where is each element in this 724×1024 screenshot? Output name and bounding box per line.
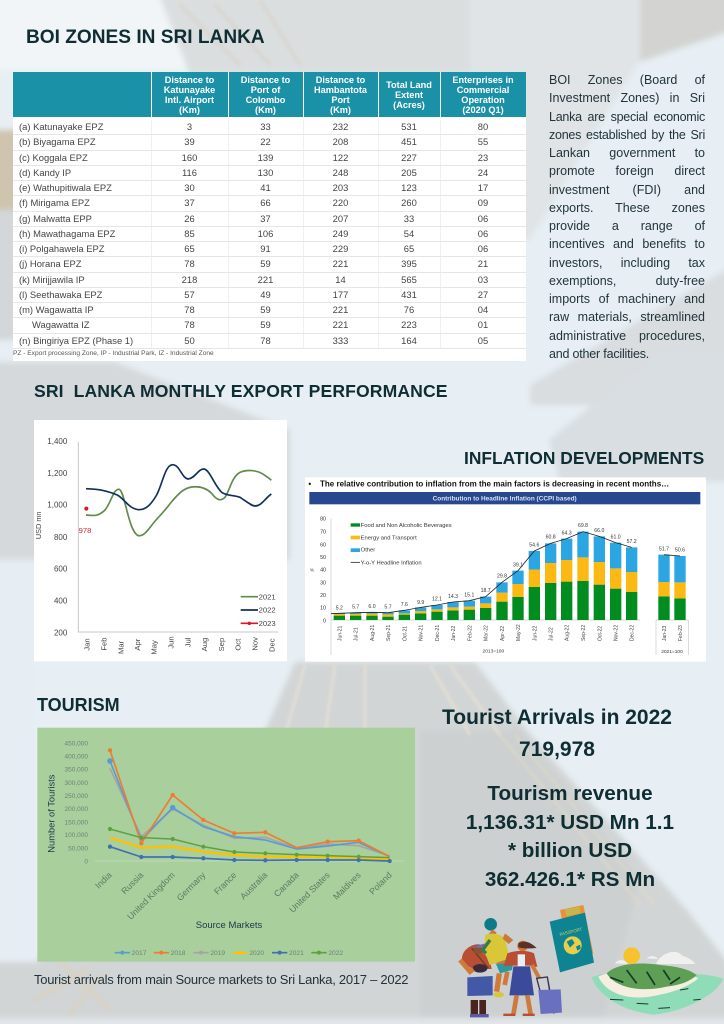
- table: BOI zones: 39: [184, 136, 195, 147]
- text block: BOI description: Investment Zones) in Sri: [549, 91, 705, 105]
- table: BOI zones: 220: [333, 197, 348, 208]
- table: BOI zones: 27: [478, 289, 488, 300]
- category labels: Maldives: [331, 870, 363, 902]
- table: BOI zones: 21: [478, 258, 488, 269]
- table: BOI zones: 260: [401, 197, 417, 208]
- table: BOI zones: (j) Horana EPZ: [19, 258, 82, 269]
- table: BOI zones: 223: [401, 319, 417, 330]
- table: BOI zones: 80: [478, 121, 488, 132]
- table: BOI zones: 04: [478, 304, 488, 315]
- table: BOI zones: 122: [333, 152, 348, 163]
- stat: tourism revenue: 1,136.31* USD Mn 1.1: [466, 811, 674, 834]
- month labels: Dec-22: [630, 625, 636, 641]
- y axis labels: 200: [54, 628, 68, 637]
- table: BOI zones: 106: [258, 228, 273, 239]
- category labels: France: [212, 870, 238, 897]
- table: BOI zones: 49: [260, 289, 271, 300]
- legend: 2020: [249, 950, 264, 957]
- x axis labels: Feb: [99, 637, 108, 651]
- series 2021: [109, 845, 391, 862]
- y axis labels: 350,000: [64, 767, 88, 774]
- table: BOI zones: 26: [184, 213, 195, 224]
- legend: 2021: [259, 592, 276, 601]
- value labels: 39.1: [513, 563, 523, 569]
- table: BOI zones: 451: [401, 136, 417, 147]
- value labels: 14.3: [448, 594, 458, 600]
- month labels: Oct-22: [597, 626, 603, 641]
- table: BOI zones: (Km): [179, 104, 200, 114]
- category labels: [93, 870, 394, 922]
- legend: 2022: [259, 606, 276, 615]
- category labels: Canada: [272, 870, 301, 899]
- table: BOI zones: 41: [260, 182, 271, 193]
- month labels: [337, 624, 684, 641]
- y axis: [310, 516, 326, 624]
- legend: 2022: [328, 950, 343, 957]
- category labels: India: [93, 870, 114, 891]
- table: BOI zones: (c) Koggala EPZ: [19, 152, 88, 163]
- legend: [115, 950, 343, 957]
- value labels: 50.6: [675, 547, 685, 553]
- text block: BOI description: exports. These zones: [549, 201, 705, 215]
- table: BOI zones: 207: [333, 213, 348, 224]
- y axis labels: 1,400: [47, 437, 68, 446]
- table: BOI zones: Distance to: [165, 74, 214, 84]
- y axis: 10: [320, 606, 326, 612]
- text block: BOI description: Lanka are special economic: [549, 110, 705, 124]
- base year labels: 2013=100: [483, 649, 504, 655]
- table: BOI zones: 232: [333, 121, 348, 132]
- y axis labels: 400,000: [64, 754, 88, 761]
- table: BOI zones: 395: [401, 258, 417, 269]
- table: BOI zones: 37: [184, 197, 195, 208]
- value labels: 66.0: [594, 528, 604, 534]
- value labels: 5.2: [336, 605, 343, 611]
- table: BOI zones: (k) Mirijjawila IP: [19, 274, 85, 285]
- y axis labels: 250,000: [64, 793, 88, 800]
- text block: BOI description: and other facilities.: [549, 347, 649, 361]
- table: BOI zones: (m) Wagawatta IP: [19, 304, 94, 315]
- table: BOI zones: 14: [335, 274, 346, 285]
- table: BOI zones: 91: [260, 243, 271, 254]
- table: BOI zones: (a) Katunayake EPZ: [19, 121, 103, 132]
- table: BOI zones: 160: [182, 152, 197, 163]
- line chart: monthly exports: [34, 420, 287, 662]
- chart title bar: [309, 492, 700, 504]
- category labels: Australia: [238, 870, 269, 901]
- y axis: 60: [320, 542, 326, 548]
- table: BOI zones: 531: [401, 121, 417, 132]
- y axis: 0: [323, 618, 326, 624]
- table: BOI zones: 65: [404, 243, 414, 254]
- table: BOI zones: Distance to: [316, 74, 365, 84]
- table: BOI zones: 30: [184, 182, 195, 193]
- table: BOI zones: 65: [184, 243, 195, 254]
- table: BOI zones: 221: [333, 319, 348, 330]
- table: BOI zones: (2020 Q1): [462, 104, 504, 114]
- table: BOI zones: Katunayake: [164, 84, 215, 94]
- value labels: 57.2: [627, 539, 637, 545]
- text block: BOI description: investors, including tax: [549, 256, 705, 270]
- month labels: Apr-22: [500, 626, 506, 641]
- value labels: 12.1: [432, 596, 442, 602]
- y axis: 70: [320, 530, 326, 536]
- series 2022: [109, 828, 390, 858]
- table: BOI zones: (Km): [330, 104, 351, 114]
- table: BOI zones: (g) Malwatta EPP: [19, 213, 92, 224]
- table: BOI zones: (n) Bingiriya EPZ (Phase 1): [19, 335, 133, 346]
- table: BOI zones: 03: [478, 274, 488, 285]
- legend: Other: [361, 548, 375, 554]
- x axis labels: [83, 636, 276, 655]
- y axis labels: 1,200: [47, 469, 68, 478]
- y axis labels: [64, 740, 88, 865]
- table: BOI zones: 203: [333, 182, 348, 193]
- table: BOI zones: 33: [260, 121, 271, 132]
- series 2017: [108, 759, 390, 857]
- x axis labels: Jan: [83, 638, 92, 651]
- x axis labels: May: [150, 640, 159, 655]
- y axis labels: [34, 437, 68, 637]
- value labels: [336, 523, 685, 611]
- table: BOI zones: 3: [187, 121, 192, 132]
- text block: BOI description: incentives and benefits to: [549, 237, 705, 251]
- table: BOI zones: (Acres): [393, 100, 425, 110]
- text block: BOI description: investment (FDI) and: [549, 182, 705, 196]
- x axis labels: Aug: [200, 638, 209, 651]
- month labels: Jul-22: [549, 627, 555, 641]
- y axis labels: 100,000: [64, 832, 88, 839]
- text block: BOI description: exemptions, duty-free: [549, 274, 705, 288]
- table: BOI zones: Operation: [461, 94, 505, 104]
- value labels: 29.8: [497, 574, 507, 580]
- table: BOI zones: 50: [184, 335, 195, 346]
- table: BOI zones: 221: [333, 304, 348, 315]
- value labels: 9.9: [417, 600, 424, 606]
- table: BOI zones: 01: [478, 319, 488, 330]
- table: BOI zones: 24: [478, 167, 488, 178]
- point: 2023 January 978: [79, 507, 91, 535]
- month labels: Aug-21: [370, 625, 376, 641]
- table: BOI zones: (i) Polgahawela EPZ: [19, 243, 104, 254]
- text block: BOI description: zones established by the Sri: [549, 128, 705, 142]
- text block: BOI description: provide a range of: [549, 219, 705, 233]
- month labels: Jul-21: [354, 627, 360, 641]
- table: BOI zones: 565: [401, 274, 417, 285]
- axis title: number of tourists: Number of Tourists: [47, 774, 57, 853]
- y axis: 30: [320, 580, 326, 586]
- stat: tourism revenue: 362.426.1* RS Mn: [485, 868, 655, 891]
- value labels: 15.1: [464, 593, 474, 599]
- x axis labels: Jun: [167, 636, 176, 649]
- table: BOI zones: 123: [401, 182, 417, 193]
- value labels: 60.8: [546, 535, 556, 541]
- table: BOI zones: 218: [182, 274, 197, 285]
- table: BOI zones: 59: [260, 304, 271, 315]
- table: BOI zones: 06: [478, 243, 488, 254]
- axis title: source markets: Source Markets: [196, 920, 263, 931]
- table: BOI zones: 09: [478, 197, 488, 208]
- table: BOI zones: 221: [333, 258, 348, 269]
- month labels: Jun-21: [337, 625, 343, 641]
- legend: [241, 592, 276, 628]
- table: BOI zones: 55: [478, 136, 488, 147]
- icon: island: [592, 947, 723, 1015]
- y axis labels: 200,000: [64, 806, 88, 813]
- x axis labels: Sep: [217, 638, 226, 651]
- table: BOI zones: 248: [333, 167, 348, 178]
- chart: contribution to headline inflation: [305, 477, 706, 662]
- x axis labels: Jul: [183, 637, 192, 647]
- base year labels: 2021=100: [661, 649, 683, 655]
- table: BOI zones: 23: [478, 152, 488, 163]
- table: BOI zones: Port of: [251, 84, 280, 94]
- table: BOI zones: Extent: [395, 90, 423, 100]
- table: BOI zones: 78: [184, 319, 195, 330]
- value labels: 5.7: [384, 605, 392, 611]
- table: BOI zones: Enterprises in: [452, 74, 514, 84]
- table: BOI zones: 06: [478, 228, 488, 239]
- bars: food: [339, 581, 680, 620]
- y axis: 50: [320, 555, 326, 561]
- table: BOI zones: (e) Wathupitiwala EPZ: [19, 182, 112, 193]
- legend: 2021: [289, 950, 304, 957]
- value labels: 69.8: [578, 523, 588, 529]
- y axis labels: 50,000: [68, 845, 88, 852]
- series 2020: [110, 838, 390, 859]
- value labels: 61.0: [611, 534, 621, 540]
- bars: other: [339, 532, 680, 614]
- table: BOI zones: 164: [401, 335, 417, 346]
- y axis: 20: [320, 593, 326, 599]
- series 2019: [110, 768, 390, 856]
- legend: Energy and Transport: [361, 535, 417, 541]
- legend: 2023: [259, 619, 276, 628]
- heading: BOI zones: BOI ZONES IN SRI LANKA: [26, 27, 265, 48]
- heading: tourism: TOURISM: [37, 695, 120, 715]
- table: BOI zones: (b) Biyagama EPZ: [19, 136, 96, 147]
- table: BOI zones: Colombo: [246, 94, 285, 104]
- category labels: United Kingdom: [125, 870, 177, 922]
- month labels: Feb-23: [678, 625, 684, 641]
- x axis labels: Apr: [133, 638, 142, 651]
- y axis: %: [310, 567, 314, 572]
- table: BOI zones: 22: [260, 136, 271, 147]
- text block: BOI description: Lankan government to: [549, 146, 705, 160]
- y axis labels: 0: [84, 858, 88, 865]
- x axis labels: Dec: [267, 638, 276, 652]
- table: BOI zones: (l) Seethawaka EPZ: [19, 289, 102, 300]
- stat: tourism revenue: Tourism revenue: [487, 782, 653, 805]
- text block: BOI description: administrative procedures,: [549, 328, 705, 342]
- table: BOI zones: 249: [333, 228, 348, 239]
- category labels: United States: [287, 870, 332, 915]
- month labels: Jan-23: [662, 625, 668, 641]
- month labels: Sep-21: [386, 625, 392, 641]
- chart: contribution to headline inflation: The relative contribution to inflation from the main factors is decreasing in recent months…: [320, 479, 669, 488]
- table: BOI zones: 54: [404, 228, 414, 239]
- table: BOI zones: Commercial: [457, 84, 509, 94]
- table: BOI zones: 139: [258, 152, 273, 163]
- table: BOI zones: 130: [258, 167, 273, 178]
- month labels: Dec-21: [435, 625, 441, 641]
- table: BOI zones: 227: [401, 152, 417, 163]
- table: BOI zones: Distance to: [241, 74, 290, 84]
- month labels: May-22: [516, 624, 522, 641]
- value labels: 51.7: [659, 546, 669, 552]
- table: BOI zones: 57: [184, 289, 195, 300]
- x axis labels: Mar: [116, 640, 125, 654]
- chart headline: •: [308, 480, 311, 489]
- line: headline inflation: [331, 532, 680, 614]
- text block: BOI description: imports of machinery and: [549, 292, 705, 306]
- value labels: 5.7: [352, 605, 359, 611]
- y axis: 40: [320, 568, 326, 574]
- table: BOI zones: PZ - Export processing Zone, IP - Industrial Park, IZ - Industrial Zone: [13, 350, 214, 357]
- illustration: travellers, passport and island: [458, 905, 724, 1018]
- text block: BOI description: promote foreign direct: [549, 164, 705, 178]
- month labels: Oct-21: [402, 626, 408, 641]
- y axis labels: USD mn: [34, 511, 43, 539]
- value labels: 18.7: [481, 588, 491, 594]
- table: BOI zones: 37: [260, 213, 271, 224]
- series 2018: [109, 749, 390, 857]
- y axis labels: 450,000: [64, 740, 88, 747]
- text block: BOI description: [549, 73, 705, 361]
- y axis labels: 150,000: [64, 819, 88, 826]
- month labels: Sep-22: [581, 625, 587, 641]
- table: BOI zones: 78: [260, 335, 271, 346]
- x axis labels: Nov: [250, 637, 259, 651]
- caption: tourism chart: Tourist arrivals from main Source markets to Sri Lanka, 2017 – 2022: [34, 972, 408, 987]
- category labels: Germany: [175, 870, 208, 903]
- legend: Y-o-Y Headline Inflation: [361, 560, 422, 566]
- table: BOI zones: 33: [404, 213, 414, 224]
- month labels: Nov-22: [614, 625, 620, 641]
- y axis labels: 600: [54, 565, 68, 574]
- y axis labels: 400: [54, 597, 68, 606]
- table: BOI zones: 177: [333, 289, 348, 300]
- icon: travellers: [460, 918, 562, 1017]
- stat: tourist arrivals: Tourist Arrivals in 2022: [442, 706, 672, 729]
- table: BOI zones: 116: [182, 167, 197, 178]
- category labels: Poland: [367, 870, 394, 897]
- value labels: 54.6: [529, 543, 539, 549]
- month labels: Aug-22: [565, 625, 571, 641]
- table: BOI zones: 208: [333, 136, 348, 147]
- month labels: Nov-21: [419, 625, 425, 641]
- table: BOI zones: 78: [184, 304, 195, 315]
- table: BOI zones: [13, 72, 526, 361]
- table: BOI zones: (d) Kandy IP: [19, 167, 71, 178]
- point: 2023 January 978: 978: [79, 526, 91, 535]
- stat: tourist arrivals: 719,978: [519, 738, 595, 761]
- table: BOI zones: 17: [478, 182, 488, 193]
- x axis labels: Oct: [234, 638, 243, 651]
- table: BOI zones: 221: [258, 274, 273, 285]
- y axis: 80: [320, 516, 326, 522]
- base year labels: [483, 649, 683, 655]
- table: BOI zones: Hambantota: [314, 84, 367, 94]
- legend: Food and Non Alcoholic Beverages: [361, 523, 452, 529]
- category labels: Russia: [119, 870, 145, 896]
- y axis labels: 300,000: [64, 780, 88, 787]
- table: BOI zones: 229: [333, 243, 348, 254]
- month labels: Feb-22: [467, 625, 473, 641]
- legend: 2018: [171, 950, 186, 957]
- heading: inflation: INFLATION DEVELOPMENTS: [464, 448, 704, 468]
- month labels: Mar-22: [484, 625, 490, 641]
- table: BOI zones: Intl. Airport: [165, 94, 214, 104]
- value labels: 7.6: [401, 602, 408, 608]
- stat: tourist arrivals: [442, 706, 672, 962]
- legend: 2019: [210, 950, 225, 957]
- legend: [351, 523, 452, 566]
- legend: 2017: [132, 950, 147, 957]
- table: BOI zones: (Km): [255, 104, 276, 114]
- y axis labels: 800: [54, 533, 68, 542]
- table: BOI zones: 205: [401, 167, 417, 178]
- icon: passport: [550, 905, 594, 972]
- icon: passport: PASSPORT: [559, 926, 583, 937]
- text block: BOI description: BOI Zones (Board of: [549, 73, 705, 87]
- month labels: Jan-22: [451, 625, 457, 641]
- line: 2022: [86, 465, 271, 510]
- table: BOI zones: 06: [478, 213, 488, 224]
- text block: BOI description: raw materials, streamlined: [549, 310, 705, 324]
- table: BOI zones: Total Land: [386, 80, 432, 90]
- line: 2021: [86, 470, 271, 536]
- table: BOI zones: 78: [184, 258, 195, 269]
- chart title bar: Contribution to Headline Inflation (CCPI based): [433, 495, 577, 502]
- table: BOI zones: 59: [260, 258, 271, 269]
- heading: export performance: SRI LANKA MONTHLY EXPORT PERFORMANCE: [34, 381, 448, 401]
- bars: energy: [339, 557, 680, 617]
- table: BOI zones: 333: [333, 335, 348, 346]
- table: BOI zones: 431: [401, 289, 417, 300]
- y axis labels: 1,000: [47, 501, 68, 510]
- table: BOI zones: 66: [260, 197, 271, 208]
- table: BOI zones: 05: [478, 335, 488, 346]
- line chart: tourist arrivals by source market: [37, 728, 415, 962]
- value labels: 64.3: [562, 530, 572, 536]
- stat: tourism revenue: * billion USD: [508, 839, 632, 862]
- table: BOI zones: 59: [260, 319, 271, 330]
- table: BOI zones: Port: [331, 94, 350, 104]
- table: BOI zones: (f) Mirigama EPZ: [19, 197, 90, 208]
- table: BOI zones: Wagawatta IZ: [32, 319, 90, 330]
- stat: tourism revenue: [466, 782, 674, 891]
- value labels: 6.0: [368, 604, 376, 610]
- table: BOI zones: 85: [184, 228, 195, 239]
- month labels: Jun-22: [532, 625, 538, 641]
- table: BOI zones: 76: [404, 304, 414, 315]
- table: BOI zones: (h) Mawathagama EPZ: [19, 228, 115, 239]
